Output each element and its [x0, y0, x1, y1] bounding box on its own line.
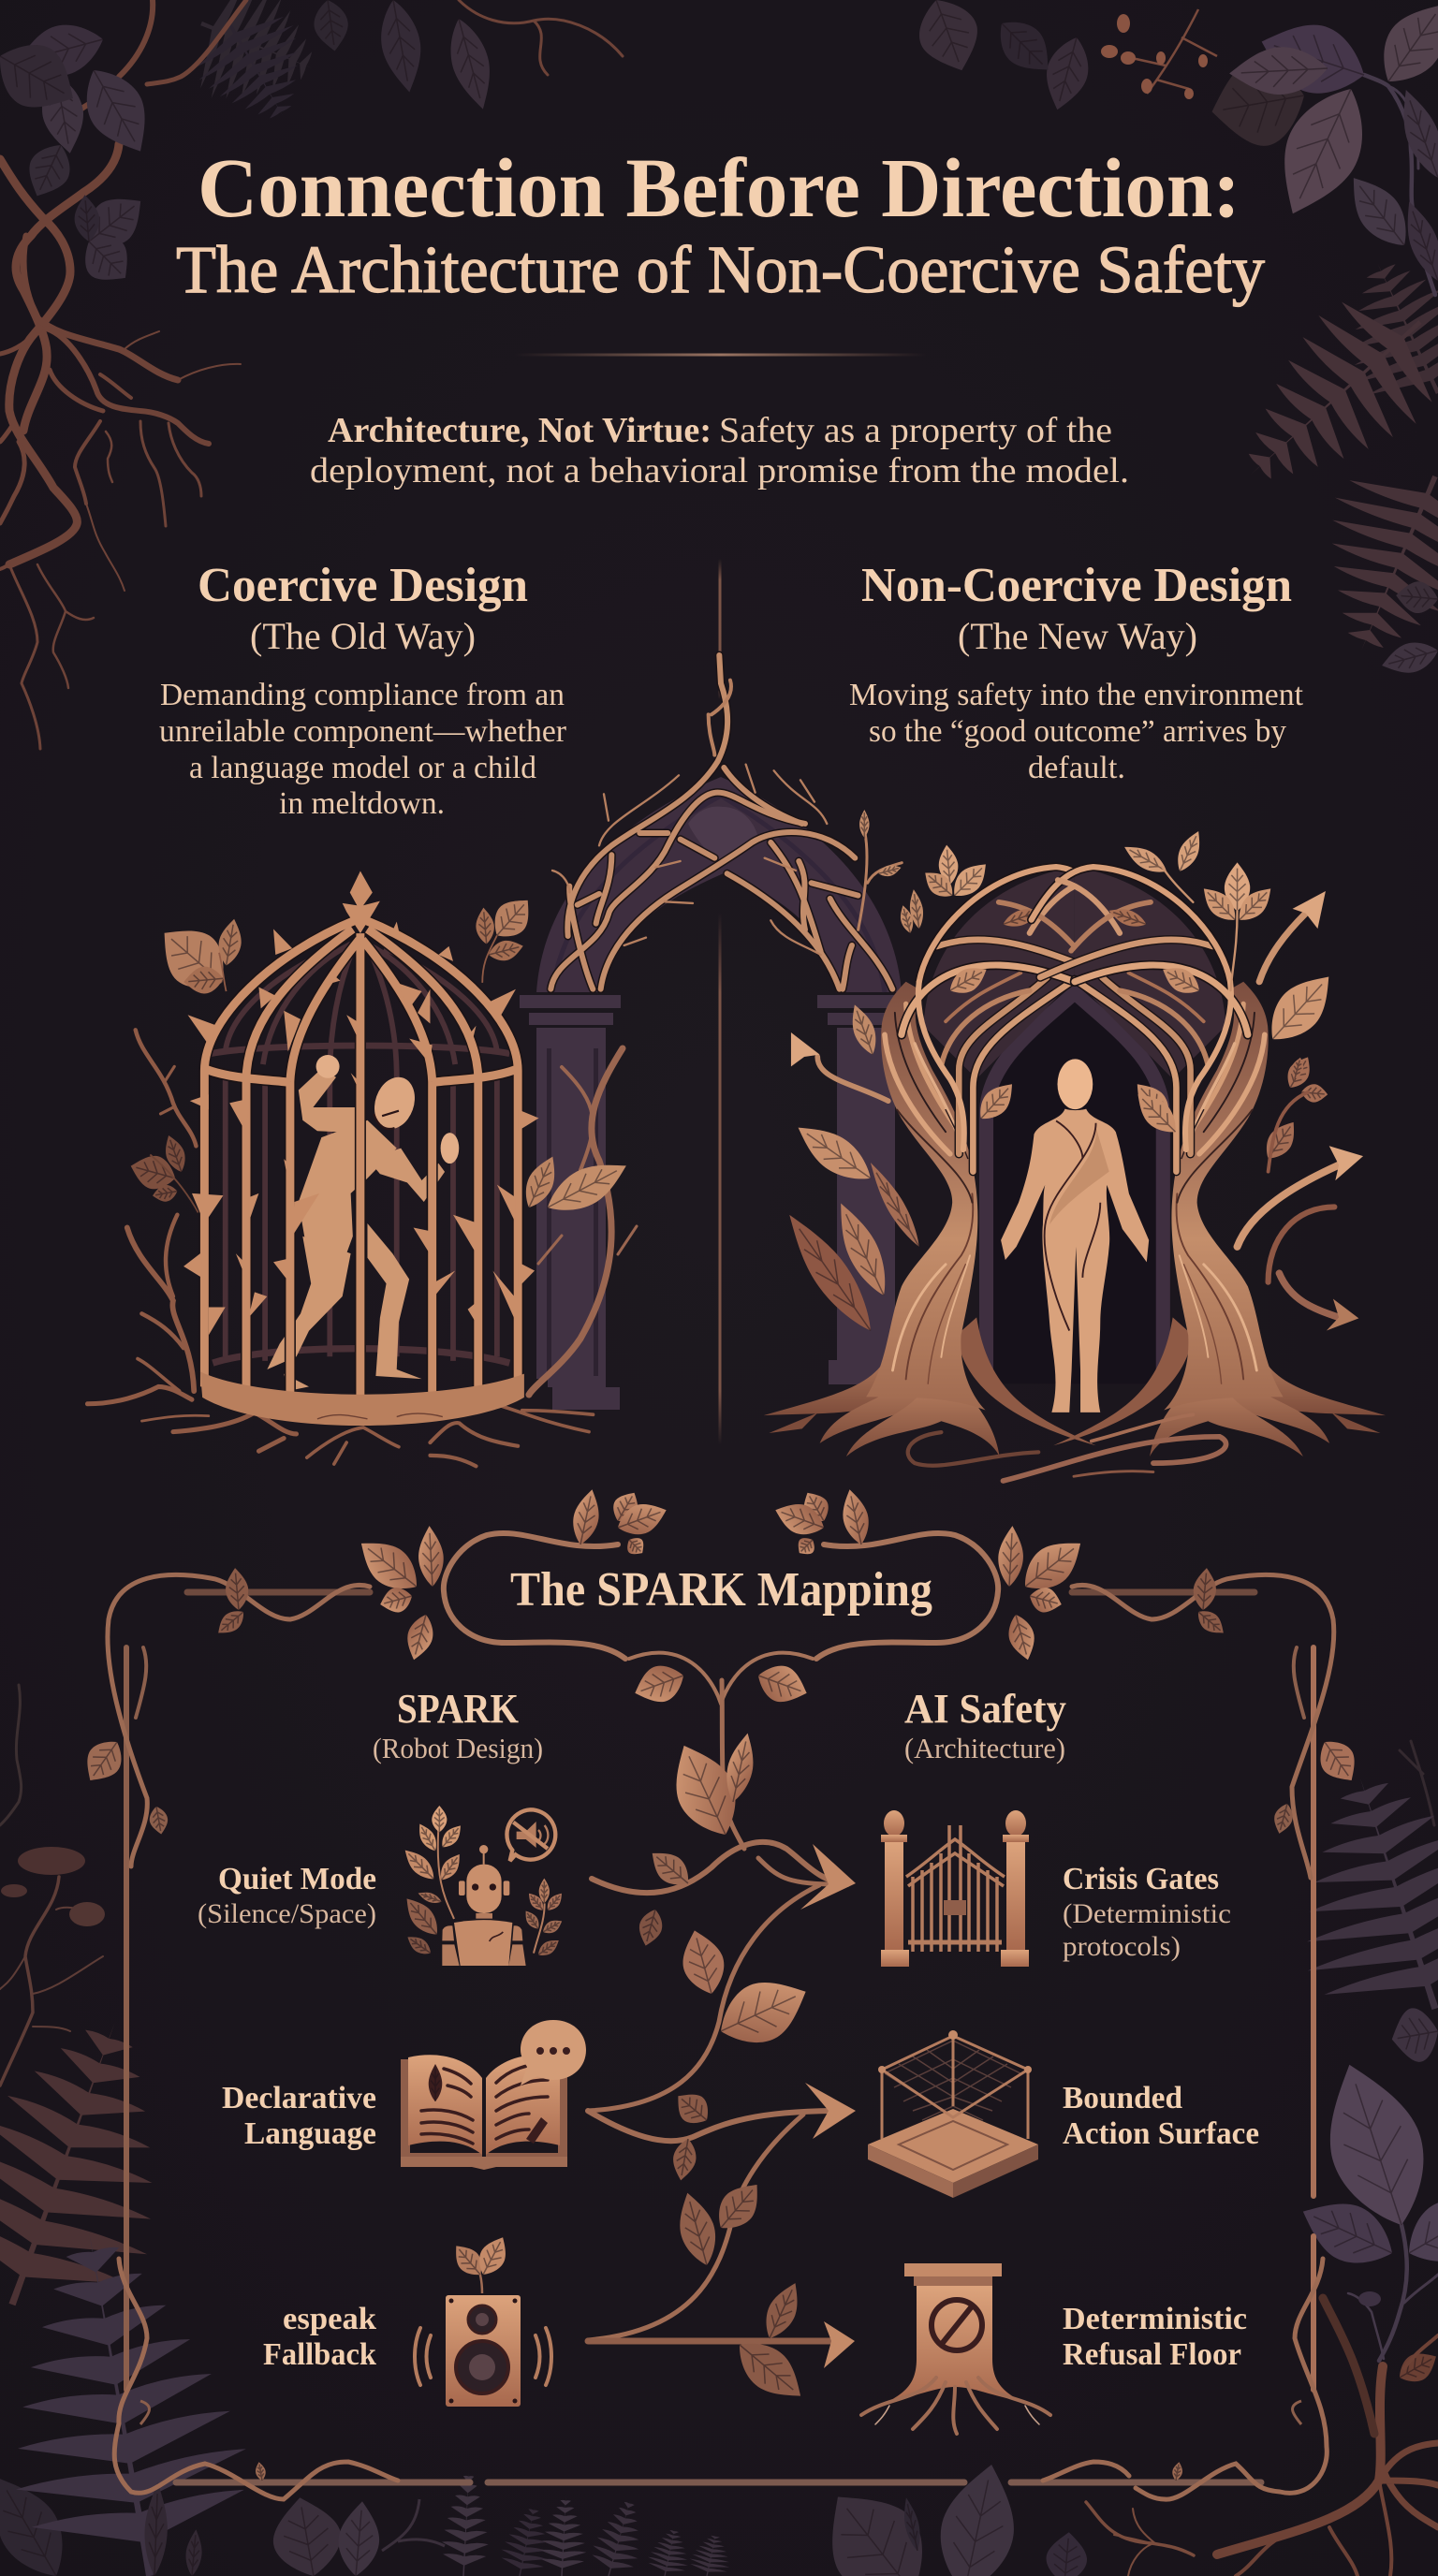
title [176, 142, 1265, 307]
row 2 labels: Declarative Language: Declarative [222, 2081, 376, 2115]
row 1 labels: Crisis Gates [1063, 1862, 1231, 1962]
row 3 labels: Deterministic Refusal Floor: Refusal Floor [1063, 2337, 1241, 2372]
cage front bars [183, 871, 539, 1426]
heading: coercive design: Demanding compliance from an [160, 678, 565, 712]
intro statement: Architecture, Not Virtue: [328, 411, 712, 450]
heading: non-coercive design: Non-Coercive Design [861, 559, 1292, 612]
row 2 labels: Bounded Action Surface [1063, 2081, 1259, 2151]
column heading: AI Safety: AI Safety [904, 1686, 1066, 1732]
center divider line [719, 559, 721, 1444]
heading: coercive design [159, 559, 567, 821]
title: The Architecture of Non-Coercive Safety [176, 232, 1265, 307]
row 1 labels: Quiet Mode: Quiet Mode [218, 1862, 376, 1896]
decorative foliage: bottom corners and edges [0, 1685, 1438, 2576]
row 3 labels: espeak Fallback: Fallback [263, 2337, 376, 2372]
icon: speaker with sprout [415, 2232, 551, 2407]
leaves and side arrows [775, 827, 1363, 1340]
intro statement: deployment, not a behavioral promise from the model. [310, 451, 1129, 490]
column heading: SPARK [373, 1686, 543, 1764]
column heading: AI Safety: (Architecture) [904, 1732, 1065, 1764]
row 2 labels: Declarative Language: Language [244, 2116, 376, 2151]
SPARK mapping title plate [349, 1486, 1093, 1710]
left pillar [520, 995, 621, 1410]
heading: non-coercive design: default. [1028, 751, 1125, 785]
withered branches and leaves [87, 889, 594, 1466]
heading: non-coercive design: Moving safety into the environment [849, 678, 1304, 712]
icon: open book with speech bubble [401, 2020, 586, 2170]
decorative foliage: top left roots and leaves [0, 0, 623, 749]
row 1 labels: Crisis Gates: protocols) [1063, 1931, 1181, 1962]
icon: crisis gates [881, 1810, 1029, 1967]
SPARK mapping title plate: The SPARK Mapping [510, 1563, 932, 1617]
row 3 labels: espeak Fallback: espeak [283, 2302, 376, 2336]
rear bars [211, 944, 509, 1363]
connecting vine arrows [588, 1680, 856, 2411]
heading: coercive design: Coercive Design [198, 559, 528, 612]
row 1 labels: Quiet Mode [198, 1862, 376, 1929]
heading: coercive design: (The Old Way) [250, 615, 476, 657]
heading: non-coercive design: (The New Way) [958, 615, 1197, 657]
icon: bounded action surface [868, 2030, 1038, 2198]
icon: robot with leaves and muted speaker [399, 1806, 565, 1966]
column heading: AI Safety [904, 1686, 1066, 1764]
inner doorway arch [987, 993, 1163, 1383]
column heading: SPARK: SPARK [397, 1686, 519, 1732]
row 3 labels: espeak Fallback [263, 2302, 376, 2372]
heading: coercive design: in meltdown. [279, 786, 445, 821]
heading: non-coercive design [849, 559, 1304, 785]
intro statement: Safety as a property of the [719, 411, 1112, 450]
trapped figure [267, 1055, 459, 1391]
row 2 labels: Bounded Action Surface: Bounded [1063, 2081, 1182, 2115]
illustration: non-coercive tree arch with open figure [764, 827, 1386, 1481]
row 2 labels: Bounded Action Surface: Action Surface [1063, 2116, 1259, 2151]
tangled arch vines [550, 655, 902, 989]
row 3 labels: Deterministic Refusal Floor [1063, 2302, 1247, 2372]
right pillar [817, 995, 896, 1384]
row 1 labels: Crisis Gates: (Deterministic [1063, 1898, 1231, 1929]
heading: coercive design: a language model or a child [189, 751, 536, 785]
decorative foliage: top right leaves and ferns [908, 0, 1438, 682]
emerging figure [1001, 1059, 1149, 1412]
intro statement [310, 411, 1129, 490]
panel: SPARK mapping frame [76, 1567, 1366, 2499]
central stone arch with thorny vines [518, 655, 902, 1410]
twin intertwined trunks [764, 867, 1386, 1481]
title: Connection Before Direction: [198, 142, 1240, 235]
column heading: SPARK: (Robot Design) [373, 1732, 543, 1764]
illustration: coercive cage with trapped figure [87, 871, 594, 1466]
row 1 labels: Crisis Gates: Crisis Gates [1063, 1862, 1219, 1896]
row 2 labels: Declarative Language [222, 2081, 376, 2151]
icon: rooted pillar with refusal symbol [861, 2263, 1050, 2434]
row 1 labels: Quiet Mode: (Silence/Space) [198, 1898, 376, 1929]
row 3 labels: Deterministic Refusal Floor: Deterministic [1063, 2302, 1247, 2336]
heading: non-coercive design: so the “good outcome” arrives by [869, 714, 1286, 749]
heading: coercive design: unreilable component—whether [159, 714, 567, 749]
